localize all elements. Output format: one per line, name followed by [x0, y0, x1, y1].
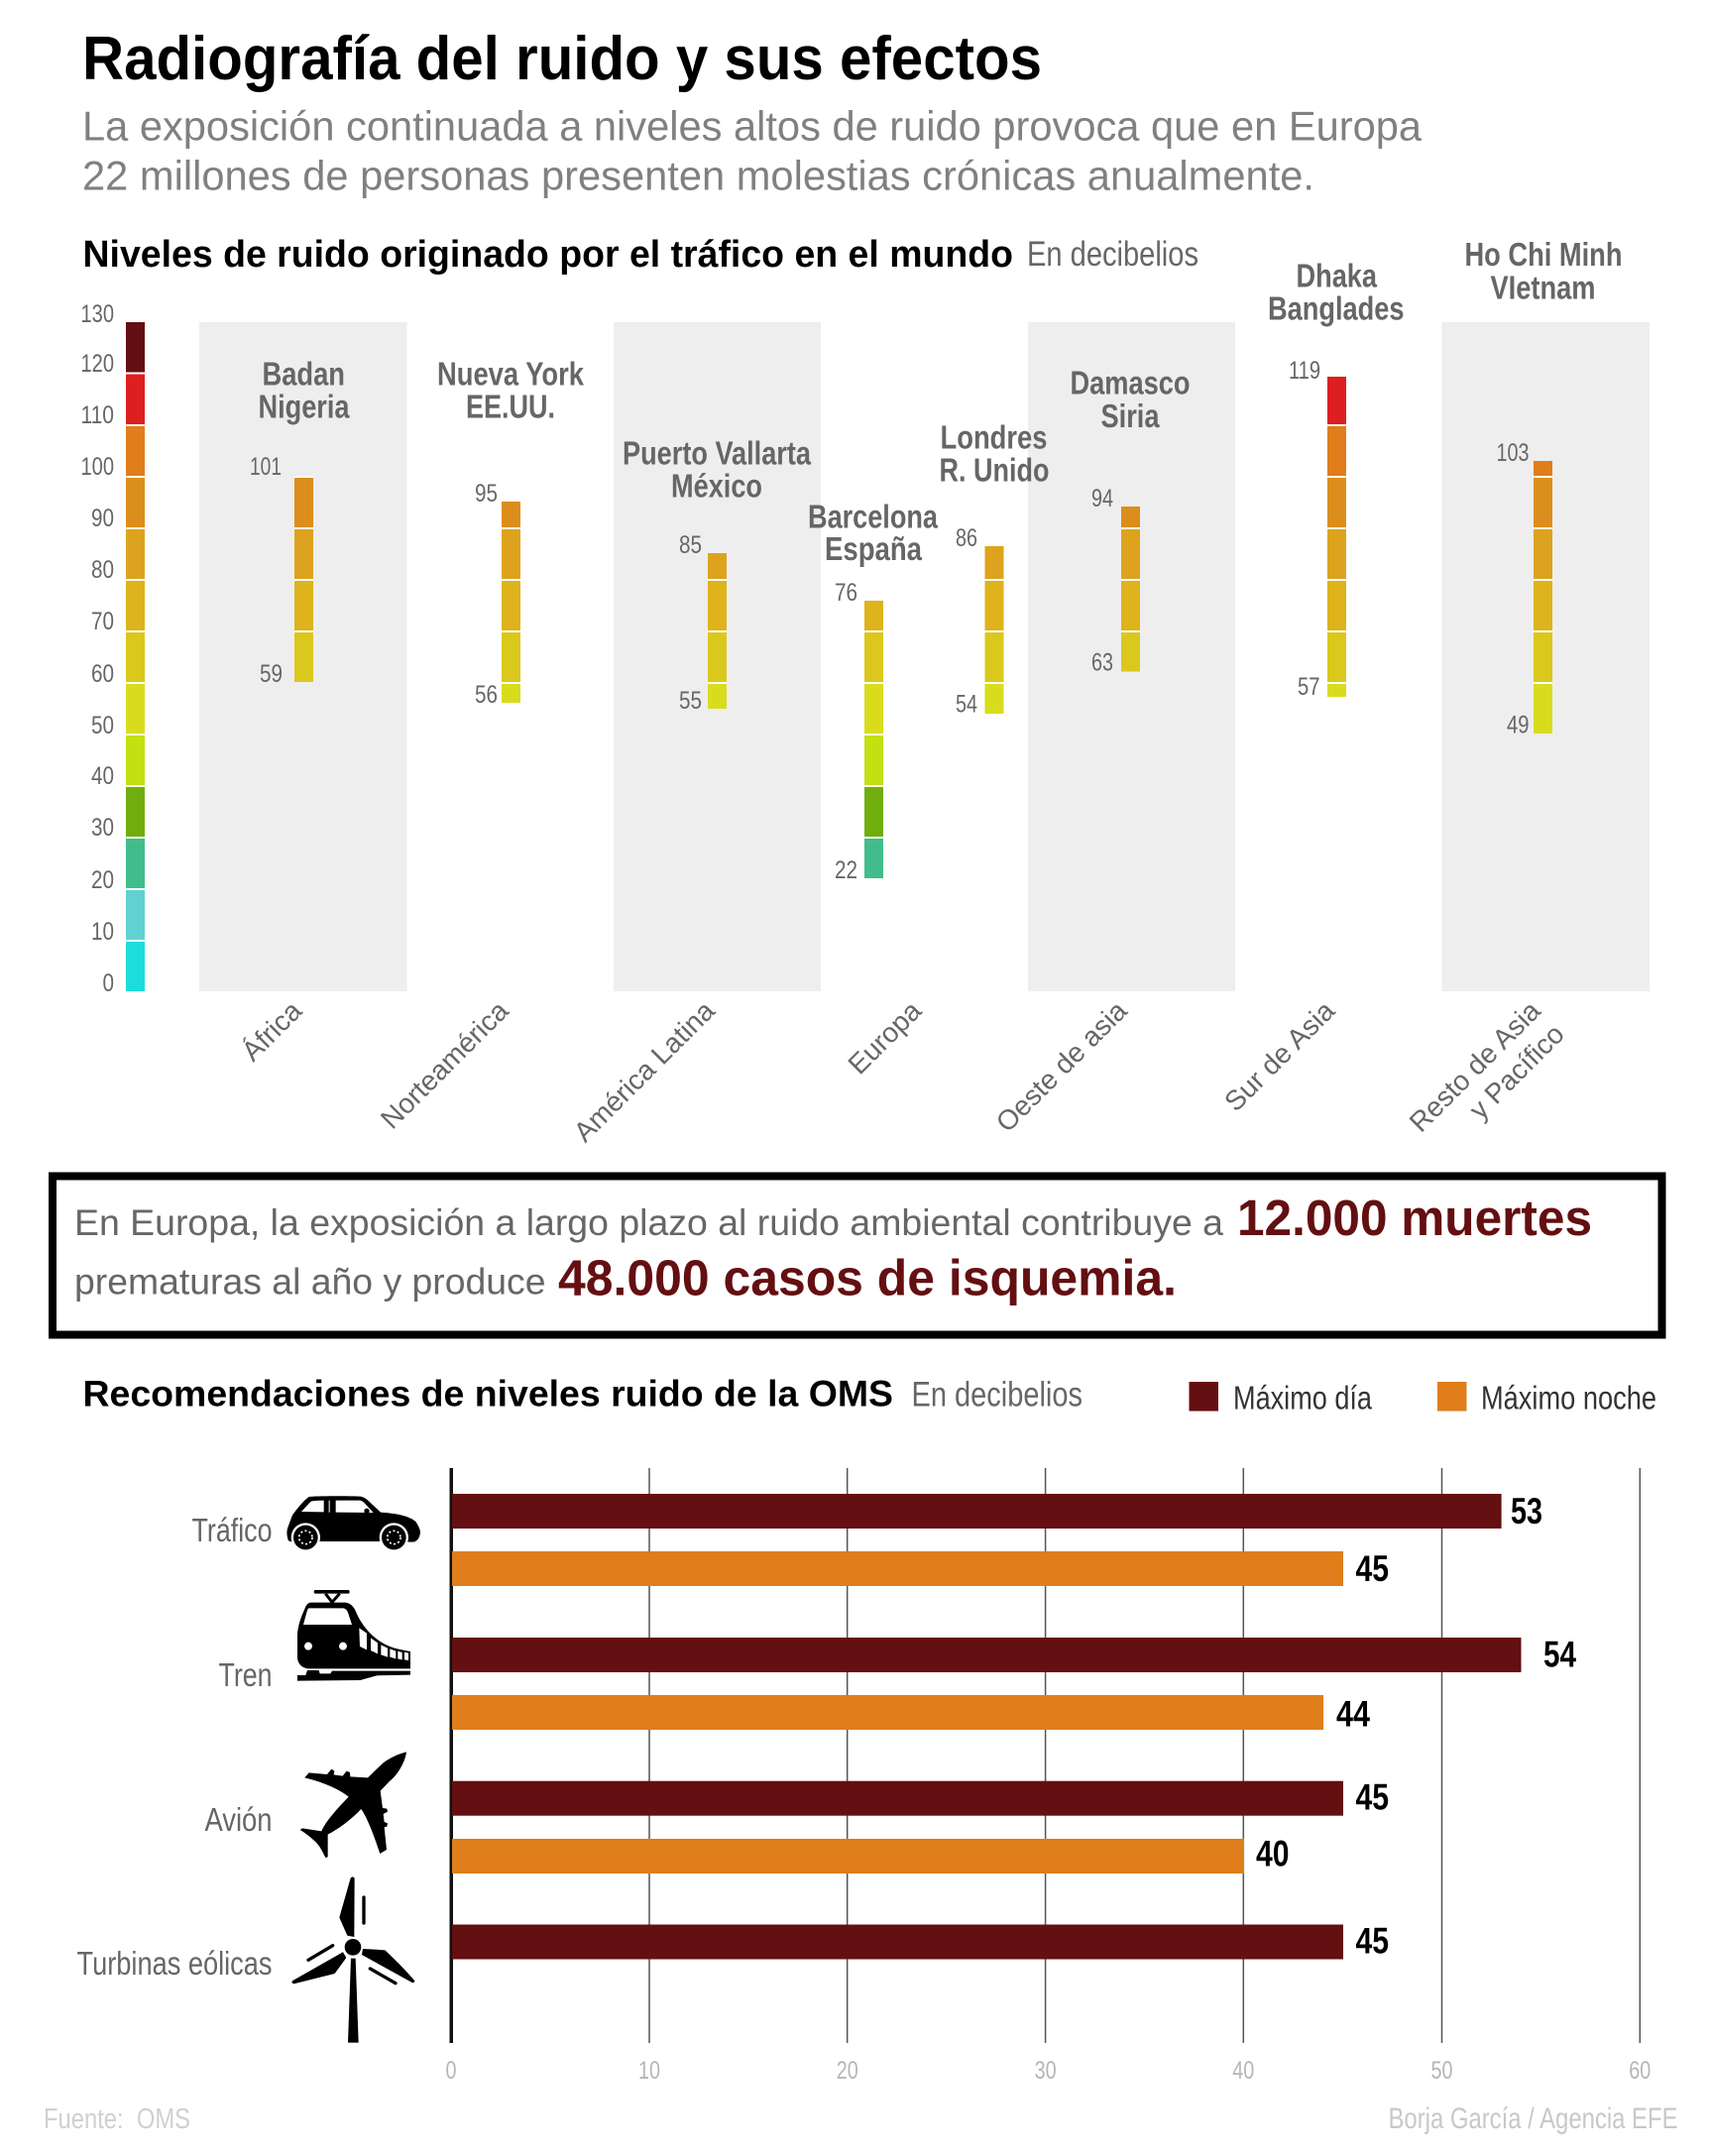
- city: Badan, Nigeria: 59: [260, 660, 283, 688]
- scale axis labels: 20: [91, 866, 114, 894]
- city: Ho Chi Minh, Vietnam: [1465, 236, 1622, 991]
- region labels: Sur de Asia: [1218, 995, 1341, 1117]
- region labels: Oeste de asia: [990, 995, 1133, 1138]
- city: Damasco, Siria: [1071, 322, 1190, 991]
- heading: WHO recommendations: En decibelios: [912, 1376, 1083, 1414]
- region labels: América Latina: [568, 995, 721, 1148]
- scale axis labels: 120: [81, 350, 114, 378]
- bars: Avión: [452, 1776, 1389, 1873]
- colour scale bar: [126, 322, 145, 991]
- region labels: y Pacífico: [1463, 1018, 1570, 1125]
- scale axis labels: 90: [91, 505, 114, 532]
- city: Puerto Vallarta, México: [623, 322, 812, 991]
- city: Badan, Nigeria: Badan: [262, 355, 345, 393]
- subtitle: La exposición continuada a niveles altos de ruido provoca que en Europa: [82, 103, 1423, 149]
- scale axis labels: 10: [91, 918, 114, 946]
- category labels: Tren: [218, 1656, 272, 1693]
- city: Puerto Vallarta, México: 55: [679, 687, 702, 715]
- title: Radiografía del ruido y sus efectos: [82, 25, 1042, 93]
- city: Barcelona, España: España: [825, 530, 923, 567]
- bars: Tren: [452, 1634, 1576, 1735]
- bars: Turbinas eólicas: [452, 1921, 1389, 1961]
- icon: train: [297, 1590, 410, 1681]
- city: Badan, Nigeria: [250, 322, 350, 991]
- city: Londres, R. Unido: R. Unido: [940, 452, 1049, 488]
- city: Dhaka, Banglades: 57: [1298, 673, 1320, 701]
- x axis labels: 60: [1629, 2057, 1651, 2085]
- heading: traffic noise: Niveles de ruido originado por el tráfico en el mundo: [83, 234, 1013, 276]
- city: Damasco, Siria: Damasco: [1071, 365, 1190, 400]
- icon: plane: [300, 1752, 406, 1858]
- city: Barcelona, España: 76: [835, 579, 857, 607]
- background bands: [199, 322, 1650, 991]
- scale axis labels: 60: [91, 660, 114, 688]
- city: Dhaka, Banglades: 119: [1289, 357, 1320, 385]
- icon: car: [286, 1496, 421, 1552]
- scale axis labels: 50: [91, 712, 114, 739]
- bars: Tráfico: 45: [1356, 1548, 1389, 1589]
- category labels: Tráfico: [192, 1512, 272, 1548]
- scale axis labels: 70: [91, 608, 114, 635]
- scale axis labels: 80: [91, 556, 114, 584]
- category labels: [77, 1512, 272, 1982]
- city: Nueva York, EE.UU.: Nueva York: [437, 355, 585, 393]
- city: Nueva York, EE.UU.: 56: [475, 681, 498, 709]
- city: Nueva York, EE.UU.: EE.UU.: [466, 389, 555, 424]
- city: Nueva York, EE.UU.: 95: [475, 480, 498, 508]
- city: Ho Chi Minh, Vietnam: 103: [1497, 439, 1529, 467]
- bars: Tráfico: [452, 1491, 1542, 1589]
- x axis labels: 40: [1232, 2057, 1254, 2085]
- category labels: Avión: [204, 1801, 272, 1838]
- icon: wind turbine: [291, 1876, 414, 2043]
- x axis labels: 30: [1035, 2057, 1057, 2085]
- city: Ho Chi Minh, Vietnam: VIetnam: [1491, 270, 1596, 305]
- city: Ho Chi Minh, Vietnam: 49: [1507, 712, 1529, 739]
- city: Badan, Nigeria: 101: [250, 453, 282, 481]
- city: Damasco, Siria: 94: [1091, 485, 1113, 512]
- city: Dhaka, Banglades: [1268, 258, 1404, 991]
- source: Fuente: OMS: [44, 2103, 190, 2135]
- scale axis labels: 30: [91, 814, 114, 842]
- city: Londres, R. Unido: [940, 322, 1049, 991]
- legend: [1190, 1380, 1656, 1416]
- callout box: 48.000 casos de isquemia.: [558, 1249, 1177, 1306]
- city: Londres, R. Unido: Londres: [940, 418, 1047, 456]
- city: Puerto Vallarta, México: Puerto Vallarta: [623, 434, 812, 472]
- bars: Tráfico: 53: [1511, 1491, 1542, 1532]
- region labels: África: [236, 995, 308, 1067]
- region labels: [236, 995, 1570, 1148]
- city: Damasco, Siria: Siria: [1100, 397, 1160, 434]
- x axis labels: [446, 2057, 1651, 2085]
- callout box: prematuras al año y produce: [74, 1261, 545, 1303]
- x axis labels: 0: [446, 2057, 456, 2085]
- x axis labels: 50: [1431, 2057, 1453, 2085]
- legend: Máximo día: [1233, 1380, 1373, 1416]
- city: Puerto Vallarta, México: 85: [679, 531, 702, 559]
- callout box: [53, 1176, 1661, 1334]
- scale axis labels: 40: [91, 762, 114, 790]
- region labels: Resto de Asia: [1404, 995, 1546, 1138]
- legend: Máximo noche: [1481, 1380, 1656, 1416]
- bars: Avión: 45: [1356, 1776, 1389, 1818]
- city: Nueva York, EE.UU.: [437, 322, 585, 991]
- scale axis labels: [81, 300, 114, 997]
- subtitle: [82, 103, 1423, 198]
- scale axis labels: 0: [103, 969, 114, 997]
- city: Dhaka, Banglades: Dhaka: [1297, 258, 1378, 293]
- city: Londres, R. Unido: 86: [956, 524, 977, 552]
- callout box: En Europa, la exposición a largo plazo al ruido ambiental contribuye a: [74, 1202, 1223, 1243]
- category labels: Turbinas eólicas: [77, 1945, 272, 1982]
- bars: Tren: 54: [1543, 1634, 1576, 1675]
- city: Barcelona, España: Barcelona: [808, 498, 939, 535]
- scale axis labels: 130: [81, 300, 114, 328]
- city: Damasco, Siria: 63: [1091, 648, 1113, 676]
- city: Badan, Nigeria: Nigeria: [258, 389, 350, 424]
- bars: Turbinas eólicas: 45: [1356, 1921, 1389, 1961]
- heading: WHO recommendations: Recomendaciones de niveles ruido de la OMS: [83, 1374, 893, 1414]
- city: Barcelona, España: [808, 322, 939, 991]
- region labels: Europa: [842, 995, 928, 1080]
- scale axis labels: 110: [81, 401, 114, 429]
- city: Barcelona, España: 22: [835, 856, 857, 884]
- bars: Avión: 40: [1256, 1834, 1289, 1873]
- bars: Tren: 44: [1336, 1693, 1370, 1735]
- city: Puerto Vallarta, México: México: [671, 468, 762, 504]
- bar chart: WHO limits: [446, 1468, 1651, 2085]
- city: Ho Chi Minh, Vietnam: Ho Chi Minh: [1465, 236, 1622, 273]
- subtitle: 22 millones de personas presenten molestias crónicas anualmente.: [82, 153, 1314, 198]
- heading: traffic noise: En decibelios: [1027, 235, 1198, 274]
- city: Dhaka, Banglades: Banglades: [1268, 289, 1404, 327]
- x axis labels: 10: [638, 2057, 660, 2085]
- region labels: Norteamérica: [375, 995, 514, 1135]
- city: Londres, R. Unido: 54: [956, 690, 977, 718]
- scale axis labels: 100: [81, 453, 114, 481]
- x axis labels: 20: [837, 2057, 858, 2085]
- callout box: 12.000 muertes: [1237, 1190, 1592, 1246]
